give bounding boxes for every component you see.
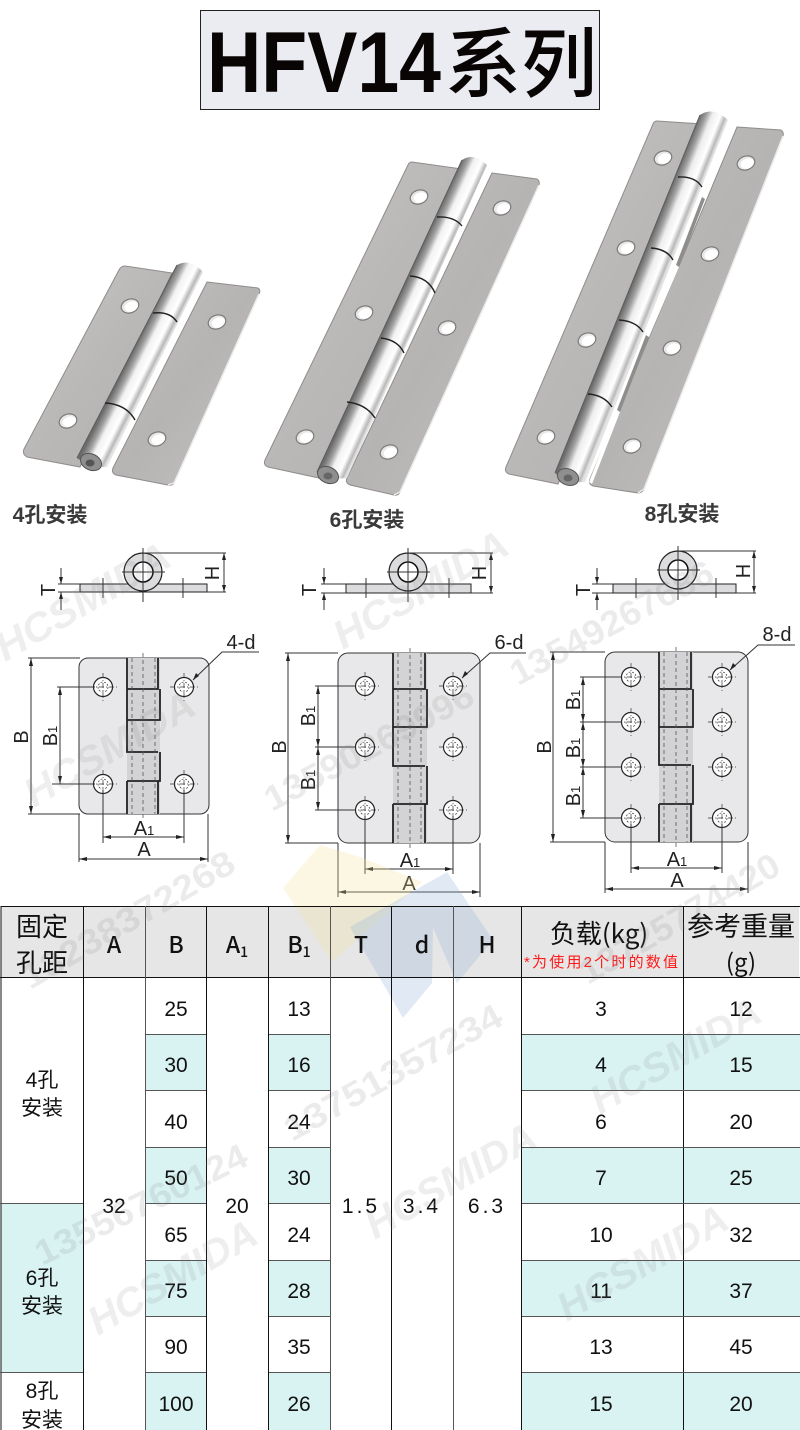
diagram: 8-hole front view: B1: [563, 738, 585, 758]
column load: 11: [590, 1280, 612, 1303]
diagram: 8-hole front view: B1: [563, 786, 585, 806]
header row text: 1: [303, 942, 311, 962]
header row text: H: [478, 926, 496, 960]
column weight: 25: [729, 1167, 753, 1190]
table grid: [0, 906, 800, 1430]
label: 4-hole: 4孔安装: [13, 504, 87, 527]
column load: 10: [589, 1224, 613, 1247]
watermarks: 13556760124: [28, 1136, 255, 1273]
watermarks: HCSMIDA: [17, 683, 203, 816]
diagram: 8-hole front view: B1: [563, 690, 585, 710]
teal highlighted cells: [1, 1035, 800, 1430]
diagram: 4-hole front view: A: [137, 839, 151, 861]
column B1: 30: [287, 1167, 311, 1190]
header row text: *为使用2个时的数值: [524, 954, 678, 971]
header row text: d: [415, 926, 429, 960]
column: hole count: 安装: [21, 1097, 63, 1120]
header row text: A: [107, 926, 122, 960]
watermarks: [0, 522, 787, 1344]
column load: 3: [595, 998, 607, 1021]
watermarks: 13549267686: [503, 553, 720, 693]
diagram: 6-hole side view: [299, 548, 493, 610]
diagram: 6-hole front view: B1: [298, 770, 320, 790]
column B1: 28: [287, 1280, 311, 1303]
diagram: 8-hole front view: [534, 624, 795, 893]
watermarks: HCSMIDA: [550, 1197, 736, 1330]
watermarks: HCSMIDA: [326, 522, 516, 658]
diagram: 4-hole front view: B: [11, 730, 33, 744]
column load: [589, 998, 613, 1416]
column B: 25: [164, 998, 188, 1021]
column load: 15: [589, 1393, 613, 1416]
column load: 7: [595, 1167, 607, 1190]
diagram: 6-hole front view: [269, 632, 526, 897]
column weight: 37: [729, 1280, 753, 1303]
watermarks: HCSMIDA: [80, 1212, 265, 1344]
header row text: 孔距: [16, 943, 68, 980]
diagram: 8-hole side view: [573, 546, 756, 610]
column B: [158, 998, 194, 1416]
header row text: [16, 905, 795, 980]
diagram: 8-hole side view: T: [573, 584, 595, 596]
column weight: [729, 998, 753, 1416]
column weight: 20: [729, 1111, 753, 1134]
label: 8-hole: 8孔安装: [645, 503, 719, 526]
diagram: 6-hole side view: T: [299, 584, 321, 596]
watermarks: 13751357234: [277, 996, 510, 1149]
column load: 6: [595, 1111, 607, 1134]
diagram: 4-hole front view: A1: [134, 818, 154, 840]
diagram: 8-hole front view: B: [534, 740, 556, 754]
column weight: 12: [729, 998, 753, 1021]
header row text: B: [287, 926, 303, 960]
merged columns A, A1, T, d, H: 20: [225, 1195, 249, 1218]
column B1: 16: [287, 1054, 311, 1077]
column B: 50: [164, 1167, 188, 1190]
logo watermark: [283, 845, 493, 1018]
column B: 30: [164, 1054, 188, 1077]
column B1: 24: [287, 1111, 311, 1134]
header row text: 固定: [16, 907, 68, 944]
column B: 40: [164, 1111, 188, 1134]
diagram: 6-hole front view: B1: [298, 706, 320, 726]
header row text: 负载(kg): [550, 914, 648, 951]
column weight: 45: [729, 1336, 753, 1359]
column B: 100: [158, 1393, 194, 1416]
watermarks: 13238372268: [15, 843, 242, 997]
photo: 6-hole hinge: [264, 157, 539, 495]
diagram: 4-hole side view: T: [38, 584, 60, 596]
table header background: [1, 907, 799, 977]
diagram: 6-hole front view: A: [402, 873, 416, 895]
label: 6-hole: 6孔安装: [330, 509, 404, 532]
header row text: T: [354, 926, 368, 960]
column load: 13: [589, 1336, 613, 1359]
diagram: 8-hole front view: A1: [667, 849, 687, 871]
title: HFV14: [207, 15, 441, 111]
header row text: A: [226, 926, 240, 960]
column B: 90: [164, 1336, 188, 1359]
column weight: 15: [729, 1054, 753, 1077]
column: hole count: 8孔: [26, 1380, 58, 1403]
column: hole count: [21, 1069, 63, 1430]
column load: 4: [595, 1054, 607, 1077]
watermarks: HCSMIDA: [358, 1115, 544, 1248]
title: [200, 3, 600, 113]
merged columns A, A1, T, d, H: 32: [102, 1195, 126, 1218]
diagram: 8-hole side view: H: [733, 564, 755, 578]
column B1: 24: [287, 1224, 311, 1247]
photo: 4-hole hinge: [23, 263, 260, 485]
column: hole count: 安装: [21, 1295, 63, 1318]
header row text: 1: [240, 942, 248, 962]
diagram: 4-hole front view: B1: [40, 726, 62, 746]
column B1: 26: [287, 1393, 311, 1416]
column: hole count: 4孔: [26, 1069, 58, 1092]
diagram: 8-hole front view: 8-d: [763, 624, 791, 646]
diagram: 4-hole side view: [38, 548, 226, 610]
column B1: 13: [287, 998, 311, 1021]
watermarks: 13725774420: [572, 846, 787, 992]
column weight: 32: [729, 1224, 753, 1247]
title: 系列: [445, 3, 597, 113]
column B: 65: [164, 1224, 188, 1247]
header row text: (g): [726, 943, 756, 978]
column: hole count: 6孔: [26, 1267, 58, 1290]
column B1: [287, 998, 311, 1416]
merged columns A, A1, T, d, H: 3.4: [403, 1195, 441, 1218]
diagram: 4-hole front view: [11, 632, 259, 862]
column weight: 20: [729, 1393, 753, 1416]
merged columns A, A1, T, d, H: 1.5: [342, 1195, 380, 1218]
header row text: B: [168, 926, 184, 960]
diagram: 6-hole front view: A1: [400, 850, 420, 872]
diagram: 6-hole front view: B: [269, 740, 291, 754]
diagram: 6-hole side view: H: [469, 566, 491, 580]
merged columns A, A1, T, d, H: 6.3: [468, 1195, 506, 1218]
column B1: 35: [287, 1336, 311, 1359]
merged columns A, A1, T, d, H: [102, 1195, 506, 1218]
gap strips beside barrel: [617, 197, 705, 412]
watermarks: HCSMIDA: [582, 990, 769, 1123]
diagram: 4-hole side view: H: [202, 566, 224, 580]
diagram: 6-hole front view: 6-d: [495, 632, 523, 654]
diagram: 4-hole front view: 4-d: [227, 632, 255, 654]
header row text: 参考重量: [687, 905, 795, 944]
photo: 8-hole hinge: [505, 111, 783, 493]
column B: 75: [164, 1280, 188, 1303]
watermarks: 13590269996: [257, 676, 481, 819]
diagram: 8-hole front view: A: [670, 870, 684, 892]
specification table: [0, 845, 800, 1430]
